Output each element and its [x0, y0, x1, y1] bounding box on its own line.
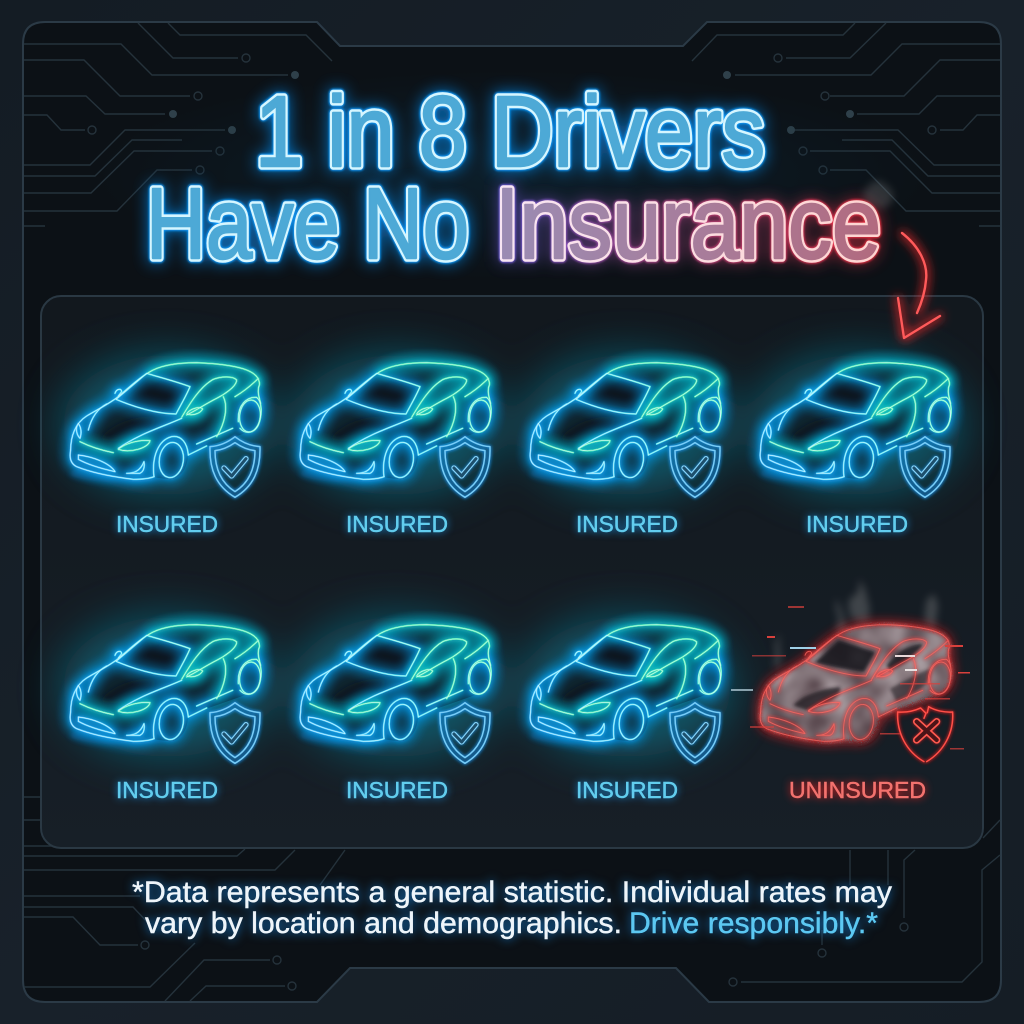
icon: broken car	[760, 625, 952, 741]
title	[92, 70, 932, 280]
icon: car	[300, 363, 492, 483]
label: INSURED	[116, 777, 218, 803]
icon: shield check	[210, 703, 260, 763]
insured car 7	[530, 625, 722, 803]
glitch streaks	[731, 606, 970, 750]
icon: shield check	[670, 703, 720, 763]
icon: shield check	[210, 437, 260, 497]
label: INSURED	[116, 511, 218, 537]
footnote	[132, 876, 892, 940]
insured car 6	[300, 625, 492, 803]
title line 1: 1 in 8 Drivers	[255, 76, 765, 188]
panel: car grid	[41, 296, 983, 848]
title line 2: insurance: Insurance	[495, 168, 881, 280]
insured car 5	[70, 625, 262, 803]
icon: shield check	[670, 437, 720, 497]
label: INSURED	[346, 511, 448, 537]
label: INSURED	[576, 511, 678, 537]
uninsured car 8	[731, 578, 970, 803]
title line 1: 1 in 8 Drivers	[255, 76, 765, 188]
icon: car	[70, 625, 262, 745]
title line 2: insurance: Insurance	[495, 168, 881, 280]
icon: car	[70, 363, 262, 483]
icon: smoke	[775, 578, 938, 670]
icon: broken shield	[898, 707, 953, 762]
title line 2: have no: Have No	[146, 168, 469, 280]
icon: car	[300, 625, 492, 745]
smoke above insurance	[864, 181, 890, 207]
footnote highlight: Drive responsibly.*	[629, 907, 878, 940]
title line 2: have no: Have No	[146, 168, 469, 280]
footnote line 1: *Data represents a general statistic. Individual rates may	[132, 876, 892, 909]
icon: car	[530, 625, 722, 745]
insured car 3	[530, 363, 722, 537]
label: INSURED	[346, 777, 448, 803]
title line 2: insurance: Insurance	[495, 168, 881, 280]
title line 1: 1 in 8 Drivers	[255, 76, 765, 188]
icon: shield check	[900, 437, 950, 497]
panel glow behind cars	[62, 355, 962, 757]
label: UNINSURED	[789, 777, 926, 803]
label: INSURED	[576, 777, 678, 803]
icon: shield check	[440, 437, 490, 497]
title line 2: insurance: Insurance	[495, 168, 881, 280]
title line 2: have no: Have No	[146, 168, 469, 280]
insured car 1	[70, 363, 262, 537]
title line 2: have no: Have No	[146, 168, 469, 280]
icon: car	[760, 363, 952, 483]
title line 1: 1 in 8 Drivers	[255, 76, 765, 188]
insured car 4	[760, 363, 952, 537]
icon: shield check	[440, 703, 490, 763]
icon: car	[530, 363, 722, 483]
arrow	[898, 233, 940, 338]
insured car 2	[300, 363, 492, 537]
label: INSURED	[806, 511, 908, 537]
footnote line 2: vary by location and demographics.	[145, 907, 622, 940]
